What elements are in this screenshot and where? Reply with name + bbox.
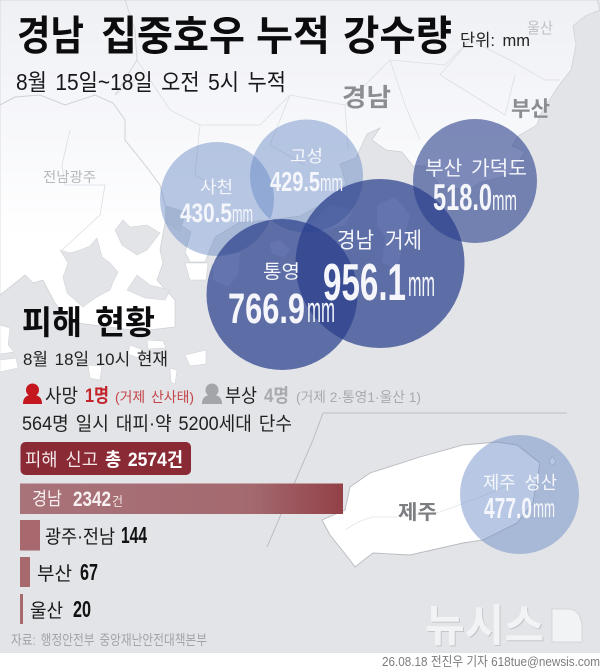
bottom strip (0, 653, 600, 669)
badge: total reports: 피해 신고 (25, 450, 98, 470)
value: 제주 성산 477.0mm: 제주 성산 (483, 473, 557, 493)
map label: 울산: 울산 (527, 20, 553, 37)
logo: 뉴시스: 뉴시스 (426, 603, 545, 652)
subtitle: 8월 15일~18일 오전 5시 누적 (16, 69, 286, 95)
deaths text: (거제 산사태) (115, 389, 194, 405)
decorative region borders (0, 0, 560, 250)
map label: 경남: 경남 (342, 84, 391, 112)
value: 부산 가덕도 518.0mm: mm (492, 185, 517, 217)
title (17, 13, 452, 59)
value: 경남 거제 956.1mm (323, 228, 435, 312)
value: 고성 429.5mm: 429.5 (270, 166, 320, 197)
circle: 통영 (206, 219, 358, 370)
evacuation and outage text: 564명 일시 대피·약 5200세대 단수 (22, 413, 292, 435)
bar: 경남 2342: 경남 (32, 489, 62, 509)
deaths text (45, 385, 194, 407)
value: 제주 성산 477.0mm: mm (533, 493, 555, 523)
map: southern Korea (0, 0, 600, 384)
bar: 울산 20: 울산 (30, 600, 63, 622)
decorative islands (0, 263, 208, 384)
bar: 광주·전남 144: 광주·전남 (45, 526, 115, 548)
title: 집중호우 (101, 13, 245, 59)
bar: 울산 20: 20 (73, 596, 91, 622)
badge: total reports (20, 442, 191, 475)
value: 통영 766.9mm (228, 261, 335, 333)
injuries text (225, 385, 421, 407)
value: 사천 430.5mm: 사천 (200, 178, 233, 197)
heading: 피해 현황 (22, 304, 155, 341)
title: 누적 (256, 13, 330, 59)
value: 사천 430.5mm: 430.5 (180, 198, 232, 228)
injuries text: (거제 2·통영1·울산 1) (296, 389, 421, 405)
value: 부산 가덕도 518.0mm: 부산 가덕도 (425, 157, 527, 180)
value: 제주 성산 477.0mm: 477.0 (484, 493, 532, 525)
value: 제주 성산 477.0mm (483, 473, 557, 525)
bar: 경남 2342: 건 (112, 494, 123, 509)
value: 경남 거제 956.1mm: 956.1 (323, 254, 406, 312)
circle: 경남 거제 (296, 179, 464, 348)
value: 부산 가덕도 518.0mm (425, 157, 527, 218)
title: 경남 (17, 13, 84, 59)
value: 고성 429.5mm (270, 147, 343, 197)
map label: 전남광주: 전남광주 (43, 169, 96, 185)
icon: gray person (202, 384, 222, 404)
value: 경남 거제 956.1mm: 경남 거제 (337, 228, 422, 253)
bar chart: damage reports by region (20, 484, 343, 624)
heading: 피해 현황: 현황 (95, 304, 155, 341)
date note: 8월 18일 10시 현재 (23, 350, 168, 369)
circle: 부산 가덕도 (413, 119, 537, 243)
bar: 경남 2342: 2342 (73, 488, 111, 511)
bar: 울산 20 (20, 594, 91, 624)
map label: 부산: 부산 (511, 98, 550, 121)
bar: 경남 2342 (20, 484, 343, 514)
text: mm (408, 263, 435, 304)
injuries text: 부상 (225, 385, 257, 407)
map label: 제주: 제주 (398, 501, 437, 524)
source note: 자료: 행정안전부 중앙재난안전대책본부 (11, 632, 207, 648)
deaths text: 1명 (85, 385, 109, 407)
circle: 제주 성산 (460, 435, 579, 554)
value: 통영 766.9mm: 766.9 (228, 285, 305, 333)
circle: 고성 (250, 120, 363, 232)
bar: 부산 67: 부산 (37, 563, 72, 585)
bar: 광주·전남 144: 144 (121, 522, 147, 548)
text: mm (307, 289, 335, 330)
unit note: 단위: mm (460, 31, 530, 50)
bar: 부산 67 (20, 557, 98, 587)
circle: 사천 (160, 142, 274, 256)
value: 부산 가덕도 518.0mm: 518.0 (433, 177, 492, 218)
map: Jeju island (322, 442, 556, 567)
heading: 피해 현황: 피해 (22, 304, 82, 341)
value: 고성 429.5mm: 고성 (290, 147, 323, 166)
deaths text: 사망 (45, 385, 78, 407)
bar: 부산 67: 67 (80, 559, 98, 585)
map: Jeju inset frame (267, 413, 567, 547)
decorative land under circles (213, 197, 410, 287)
value: 사천 430.5mm: mm (232, 201, 253, 228)
injuries text: 4명 (264, 385, 289, 407)
value: 고성 429.5mm: mm (320, 170, 343, 197)
badge: total reports: 총 2574건 (105, 449, 183, 471)
value: 사천 430.5mm (180, 178, 253, 228)
value: 통영 766.9mm: 통영 (263, 261, 300, 283)
icon: red person (23, 384, 42, 404)
title: 강수량 (343, 13, 452, 59)
bar: 광주·전남 144 (20, 520, 147, 550)
logo: 뉴시스: 뉴시스 (425, 602, 544, 651)
